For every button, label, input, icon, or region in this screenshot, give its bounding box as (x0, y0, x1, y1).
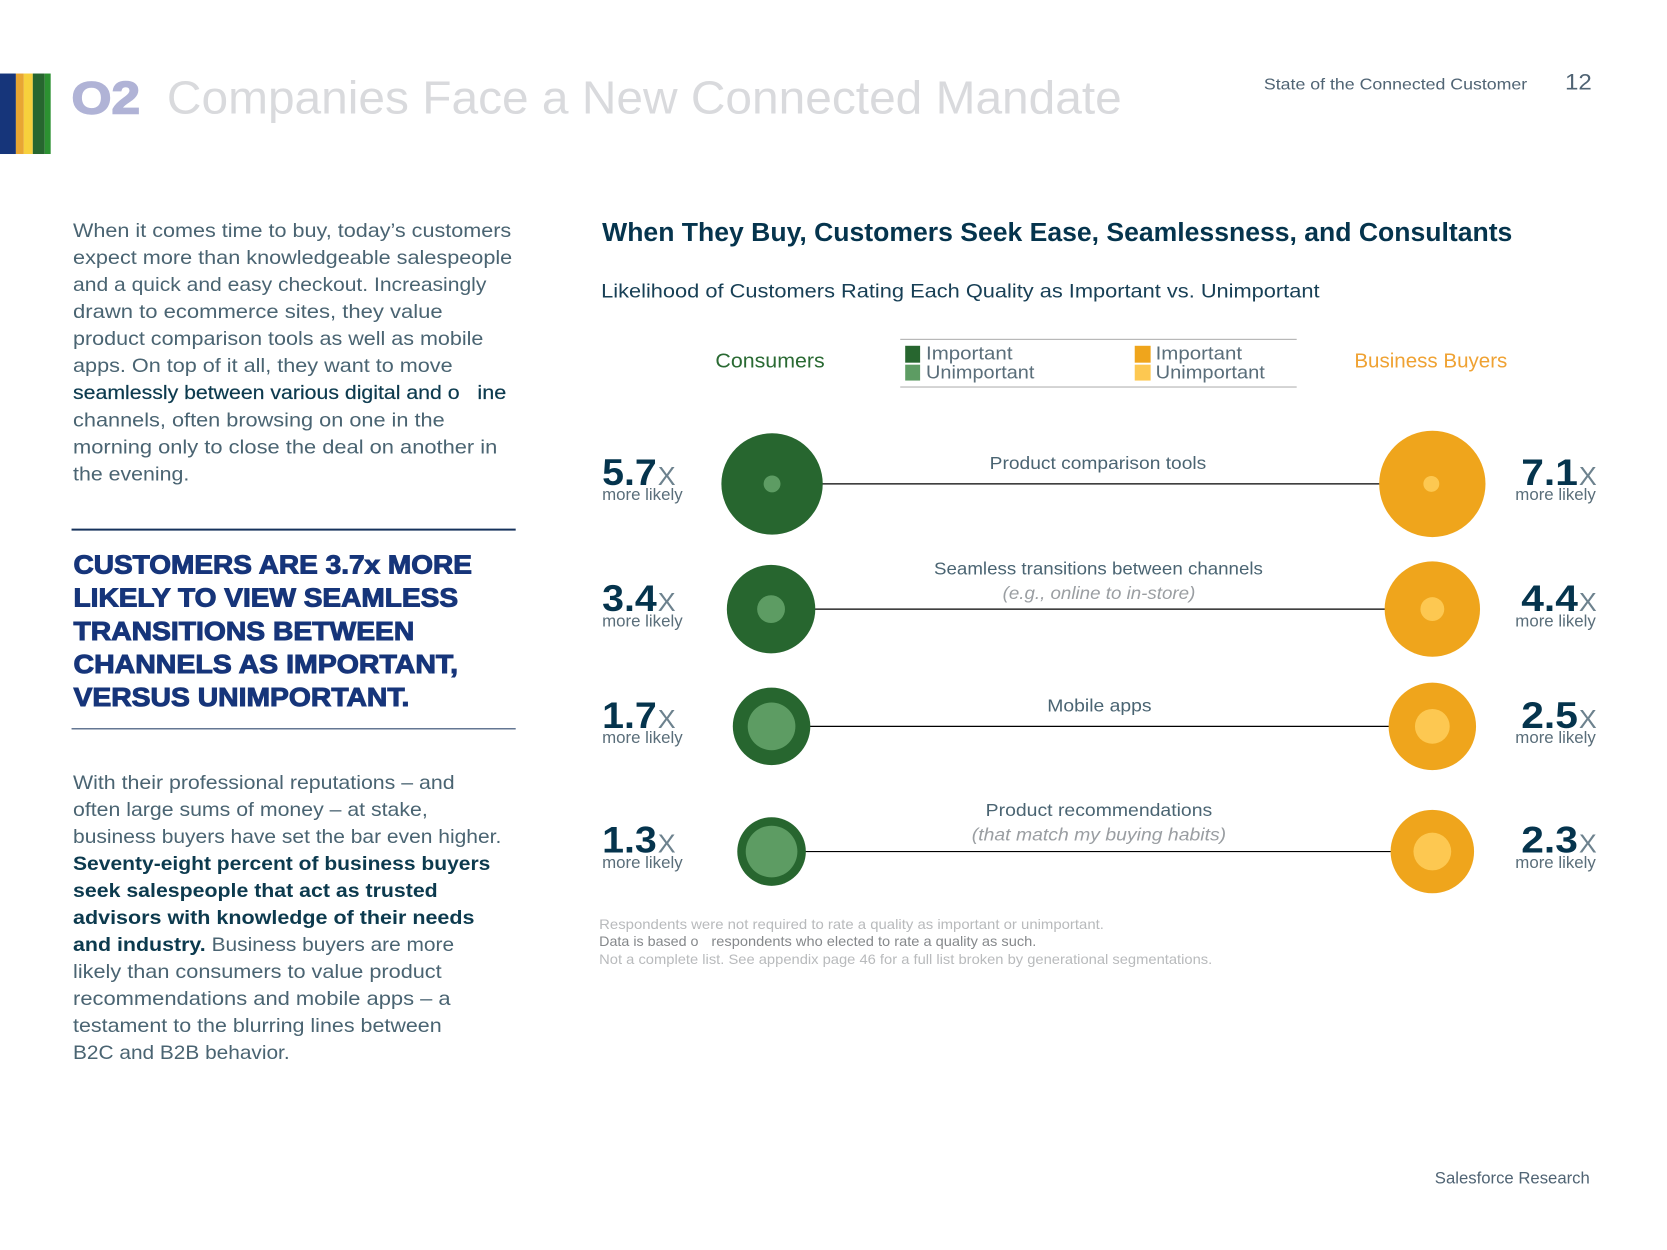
row: mobile apps: more likely (602, 729, 683, 747)
row: product comparison tools: more likely (602, 486, 683, 504)
row: product comparison tools (602, 431, 1597, 537)
legend: Important (1156, 343, 1242, 364)
row: product recommendations: X (658, 831, 676, 859)
text block: intro paragraph: channels, often browsing on one in the (73, 409, 445, 431)
row: seamless transitions: more likely (1515, 612, 1597, 630)
text block: business buyers paragraph: and industry. (73, 934, 206, 956)
row: seamless transitions (602, 558, 1597, 657)
callout: seamless transitions: CUSTOMERS ARE 3.7x MORE (74, 551, 472, 579)
text block: business buyers paragraph: likely than consumers to value product (73, 961, 442, 983)
footnotes (599, 917, 1212, 967)
legend: Unimportant (926, 362, 1034, 383)
text block: business buyers paragraph: Seventy-eight percent of business buyers (73, 853, 490, 875)
text block: intro paragraph: and a quick and easy checkout. Increasingly (73, 274, 487, 296)
footnotes: Data is based o (599, 934, 699, 949)
text block: intro paragraph (73, 220, 512, 485)
row: product comparison tools: 7.1 (1521, 452, 1578, 493)
text block: business buyers paragraph: advisors with knowledge of their needs (73, 907, 474, 929)
text block: intro paragraph: the evening. (73, 463, 189, 485)
text block: intro paragraph: ine (477, 382, 506, 404)
text block: business buyers paragraph: often large sums of money – at stake, (73, 799, 428, 821)
footnotes: Respondents were not required to rate a quality as important or unimportant. (599, 917, 1104, 932)
row: mobile apps (602, 683, 1597, 770)
row: product comparison tools: more likely (1515, 486, 1597, 504)
text block: intro paragraph: expect more than knowledgeable salespeople (73, 247, 512, 269)
title: O2 (72, 72, 140, 123)
legend: Important (926, 343, 1013, 364)
callout: seamless transitions: CHANNELS AS IMPORTANT, (74, 651, 458, 679)
text block: business buyers paragraph: Business buyers are more (212, 934, 454, 956)
callout: seamless transitions: VERSUS UNIMPORTANT. (74, 684, 409, 712)
chart heading: When They Buy, Customers Seek Ease, Seamlessness, and Consultants (602, 217, 1512, 247)
row: seamless transitions: 4.4 (1521, 578, 1579, 619)
row: mobile apps: X (1579, 706, 1597, 734)
text block: intro paragraph: drawn to ecommerce sites, they value (73, 301, 443, 323)
row: product comparison tools: X (658, 463, 676, 491)
row: mobile apps: 1.7 (602, 695, 657, 736)
text block: intro paragraph: morning only to close the deal on another in (73, 436, 497, 458)
chart subtitle: Likelihood of Customers Rating Each Quality as Important vs. Unimportant (601, 281, 1320, 303)
row: product comparison tools: 5.7 (602, 452, 657, 493)
page number: 12 (1565, 69, 1592, 94)
row: product recommendations: 2.3 (1521, 820, 1578, 861)
column heading: consumers: Consumers (715, 351, 825, 373)
legend (900, 339, 1297, 388)
row: mobile apps: more likely (1515, 729, 1597, 747)
title: Companies Face a New Connected Mandate (167, 71, 1122, 123)
row: product recommendations: 1.3 (602, 820, 657, 861)
row: product comparison tools: X (1579, 463, 1597, 491)
callout: seamless transitions: LIKELY TO VIEW SEAMLESS (74, 585, 458, 613)
callout: seamless transitions: TRANSITIONS BETWEEN (74, 618, 414, 646)
footnotes: respondents who elected to rate a quality as such. (711, 934, 1036, 949)
text block: business buyers paragraph: business buyers have set the bar even higher. (73, 826, 501, 848)
row: product recommendations (602, 800, 1597, 893)
text block: business buyers paragraph: testament to the blurring lines between (73, 1015, 442, 1037)
column heading: business buyers: Business Buyers (1354, 351, 1507, 373)
row: product recommendations: (that match my buying habits) (972, 825, 1226, 845)
header: report name: State of the Connected Customer (1264, 76, 1528, 93)
row: seamless transitions: X (1579, 589, 1597, 617)
row: mobile apps: 2.5 (1521, 695, 1578, 736)
text block: business buyers paragraph (73, 772, 501, 1064)
row: seamless transitions: (e.g., online to in-store) (1003, 583, 1195, 603)
row: mobile apps: X (658, 706, 676, 734)
row: seamless transitions: Seamless transitions between channels (934, 558, 1263, 578)
row: product recommendations: X (1579, 831, 1597, 859)
row: product recommendations: Product recommendations (986, 800, 1212, 820)
row: seamless transitions: more likely (602, 612, 683, 630)
text block: intro paragraph: apps. On top of it all, they want to move (73, 355, 453, 377)
text block: intro paragraph: seamlessly between various digital and o (73, 382, 460, 404)
row: seamless transitions: 3.4 (602, 578, 657, 619)
legend: Unimportant (1156, 362, 1265, 383)
footnotes: Not a complete list. See appendix page 46 for a full list broken by generational segmentations. (599, 952, 1212, 967)
text block: business buyers paragraph: seek salespeople that act as trusted (73, 880, 438, 902)
text block: business buyers paragraph: With their professional reputations – and (73, 772, 455, 794)
row: product recommendations: more likely (1515, 854, 1597, 872)
icon: colour bar (0, 74, 51, 154)
text block: business buyers paragraph: recommendations and mobile apps – a (73, 988, 451, 1010)
text block: intro paragraph: When it comes time to buy, today’s customers (73, 220, 511, 242)
callout: seamless transitions (72, 529, 516, 729)
footer: source: Salesforce Research (1435, 1169, 1590, 1187)
text block: business buyers paragraph: B2C and B2B behavior. (73, 1042, 290, 1064)
text block: intro paragraph: product comparison tools as well as mobile (73, 328, 483, 350)
row: product recommendations: more likely (602, 854, 683, 872)
row: seamless transitions: X (658, 589, 676, 617)
row: product comparison tools: Product comparison tools (990, 453, 1206, 473)
row: mobile apps: Mobile apps (1047, 695, 1152, 715)
